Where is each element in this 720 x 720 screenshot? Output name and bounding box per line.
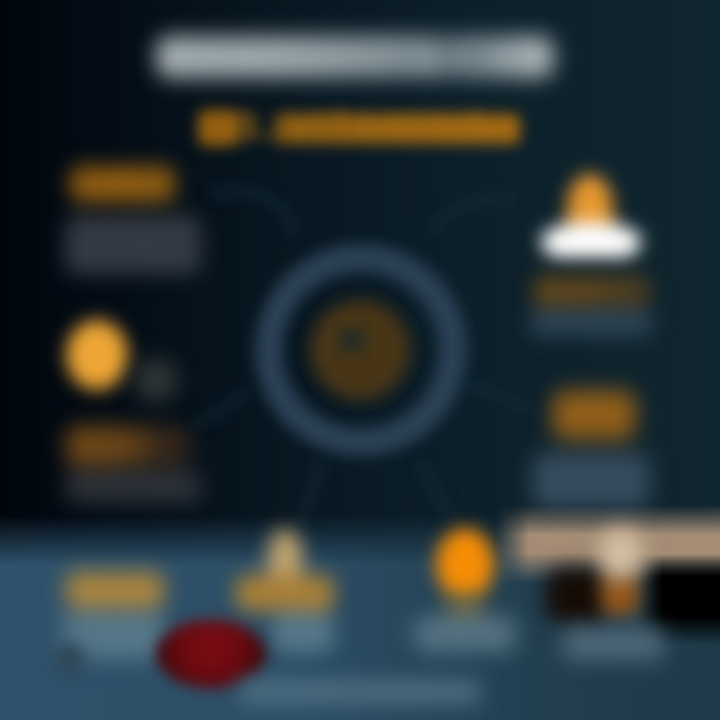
text block: upper right [522, 264, 659, 344]
title [140, 20, 570, 94]
icon: small grey mark [134, 358, 178, 402]
text block: upper right: B2 [575, 275, 609, 305]
text block: bottom middle with icon [222, 516, 348, 661]
icon: grey mark bottom left [56, 642, 84, 674]
icon: orange circle left [66, 320, 128, 390]
text block: bottom center right [406, 582, 524, 662]
text block: bottom middle with icon: B5 [267, 577, 303, 608]
text block: right [522, 374, 660, 516]
text block: lower left: B6 [109, 428, 147, 461]
text block: top left [56, 152, 210, 283]
text block: right: B12 [563, 395, 625, 433]
text block: bottom left [52, 556, 179, 668]
subtitle [188, 100, 530, 156]
connector lines [195, 191, 530, 525]
icon: red berries [147, 611, 274, 697]
illustration: bowl of food [498, 506, 720, 642]
icon: orange circle bottom [436, 528, 494, 600]
text block: top left: Energy [106, 221, 160, 238]
text block: bottom right caption [563, 628, 663, 660]
panel: bottom band [0, 515, 720, 720]
text block: bottom left: B3 [96, 573, 134, 606]
text block: lower left [52, 412, 207, 511]
text block: top left: B1 [102, 166, 143, 202]
footer text [240, 680, 480, 704]
icon: sun and cloud [528, 161, 654, 272]
